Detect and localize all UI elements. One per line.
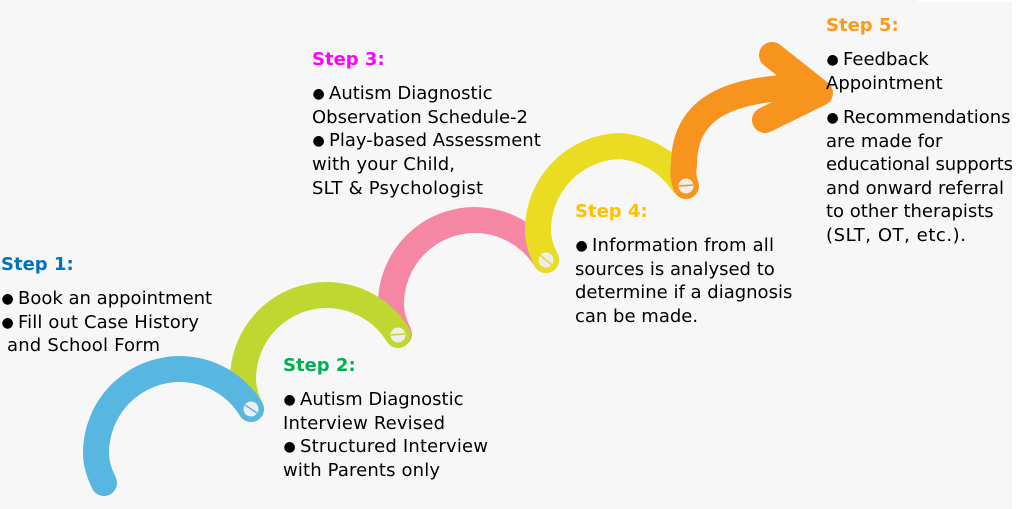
text block: step 2: Structured Interview (300, 436, 488, 457)
text block: step 3: ● (312, 86, 325, 102)
text block: step 5: are made for (826, 131, 943, 152)
text block: step 2 (283, 355, 488, 481)
text block: step 5: Recommendations (843, 107, 1011, 128)
text block: step 3: with your Child, (312, 154, 455, 175)
heading: step 3: Step 3: (312, 49, 385, 70)
text block: step 3 (312, 49, 541, 199)
text block: step 3: Observation Schedule-2 (312, 107, 528, 128)
text block: step 1: ● (2, 291, 14, 307)
text block: step 2: Autism Diagnostic (300, 389, 464, 410)
text block: step 5: (SLT, OT, etc.). (826, 225, 966, 246)
text block: step 2: with Parents only (283, 460, 440, 481)
arrow: step 5 orange (678, 55, 820, 194)
text block: step 5: ● (826, 110, 839, 126)
arc: step 1 blue (96, 369, 258, 483)
text block: step 5: Appointment (826, 73, 943, 94)
arc: step 2 green (243, 295, 406, 409)
text block: step 4 (575, 201, 792, 327)
text block: step 1: ● (2, 315, 14, 331)
heading: step 2: Step 2: (283, 355, 356, 376)
heading: step 5: Step 5: (826, 15, 899, 36)
text block: step 2: Interview Revised (283, 413, 445, 434)
text block: step 3: SLT & Psychologist (312, 178, 483, 199)
text block: step 5 (826, 15, 1013, 246)
text block: step 5: educational supports (826, 154, 1013, 175)
text block: step 4: sources is analysed to (575, 259, 775, 280)
text block: step 3: Play-based Assessment (329, 130, 541, 151)
arc: step 3 pink (391, 220, 546, 334)
text block: step 1: Book an appointment (18, 288, 212, 309)
text block: step 4: determine if a diagnosis (575, 282, 792, 303)
text block: step 2: ● (284, 392, 296, 408)
text block: step 4: can be made. (575, 306, 698, 327)
heading: step 1: Step 1: (1, 254, 74, 275)
text block: step 3: ● (312, 133, 325, 149)
text block: step 4: ● (576, 238, 588, 254)
text block: step 4: Information from all (592, 235, 774, 256)
text block: step 5: to other therapists (826, 201, 994, 222)
arc: step 4 yellow (538, 146, 682, 268)
text block: step 1: Fill out Case History (18, 312, 199, 333)
text block: step 3: Autism Diagnostic (329, 83, 492, 104)
heading: step 4: Step 4: (575, 201, 648, 222)
text block: step 5: and onward referral (826, 178, 1004, 199)
text block: step 5: ● (826, 52, 839, 68)
text block: step 1: and School Form (7, 335, 160, 356)
text block: step 2: ● (284, 439, 296, 455)
text block: step 1 (1, 254, 212, 356)
text block: step 5: Feedback (843, 49, 929, 70)
